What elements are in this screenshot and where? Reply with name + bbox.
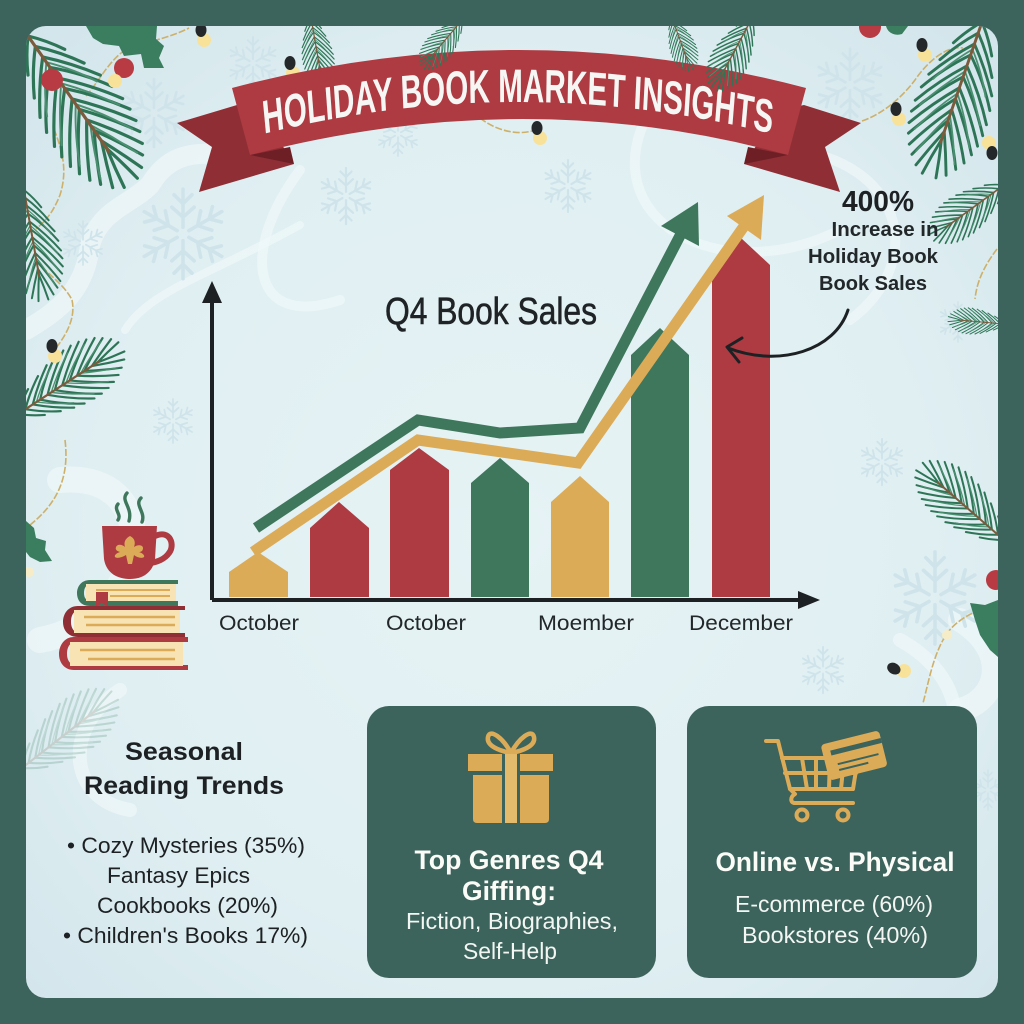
callout figure: 400% — [842, 186, 914, 218]
green trend arrow — [256, 202, 699, 528]
list: Fantasy Epics — [107, 863, 250, 888]
bar and line chart — [202, 195, 820, 635]
x axis labels: October — [386, 612, 466, 635]
icon: middle book — [63, 606, 185, 637]
body text: Bookstores (40%) — [742, 922, 928, 948]
callout: 400% increase — [727, 186, 939, 362]
icon: shopping cart with credit card — [766, 730, 888, 820]
list: Cookbooks (20%) — [97, 893, 278, 918]
heading: Reading Trends — [84, 772, 284, 800]
body text: E-commerce (60%) — [735, 891, 933, 917]
banner folds — [250, 147, 788, 164]
banner tails — [177, 105, 861, 192]
string lights — [30, 28, 998, 703]
icon: top book — [77, 580, 178, 607]
callout text: Book Sales — [819, 273, 927, 295]
pine branches over banner — [418, 26, 755, 92]
axes — [202, 281, 820, 609]
x axis labels: Moember — [538, 612, 634, 635]
body text: Fiction, Biographies, — [406, 908, 618, 934]
panel: top genres — [367, 706, 656, 978]
heading: Top Genres Q4 — [414, 845, 604, 875]
callout text — [808, 219, 939, 295]
callout text: Increase in — [832, 219, 938, 241]
callout arrow — [727, 310, 848, 362]
body text: Self-Help — [463, 938, 557, 964]
callout text: Holiday Book — [808, 246, 939, 268]
banner ribbon — [232, 50, 806, 155]
title: HOLIDAY BOOK MARKET INSIGHTS — [262, 70, 773, 134]
holly and berries — [24, 16, 1006, 657]
x axis labels: October — [219, 612, 299, 635]
title banner — [177, 50, 861, 192]
panel: online vs physical — [687, 706, 977, 978]
heading — [84, 738, 284, 800]
list: • Cozy Mysteries (35%) — [67, 833, 305, 858]
chart title: Q4 Book Sales — [385, 291, 597, 333]
x axis labels: December — [689, 612, 793, 635]
credit card — [821, 730, 888, 781]
list — [63, 833, 308, 948]
heading: Seasonal — [125, 738, 243, 766]
icon: steam — [116, 493, 143, 522]
gold trend arrow — [253, 195, 764, 552]
pine branch: faded bottom left — [26, 688, 120, 770]
heading — [414, 845, 604, 906]
panel: seasonal reading trends — [63, 738, 308, 948]
x axis labels — [219, 612, 793, 635]
bulbs — [46, 23, 998, 682]
heading: Giffing: — [462, 876, 556, 906]
cart — [766, 741, 858, 820]
body text — [735, 891, 933, 948]
icon: bottom book — [59, 637, 188, 670]
heading: Online vs. Physical — [716, 847, 954, 877]
body text — [406, 908, 618, 964]
icon: coffee cup on books — [59, 493, 188, 670]
icon: gift — [468, 734, 553, 823]
pine branches — [0, 10, 1021, 560]
bars — [229, 238, 770, 597]
list: • Children's Books 17%) — [63, 923, 308, 948]
icon: cup — [102, 526, 172, 579]
